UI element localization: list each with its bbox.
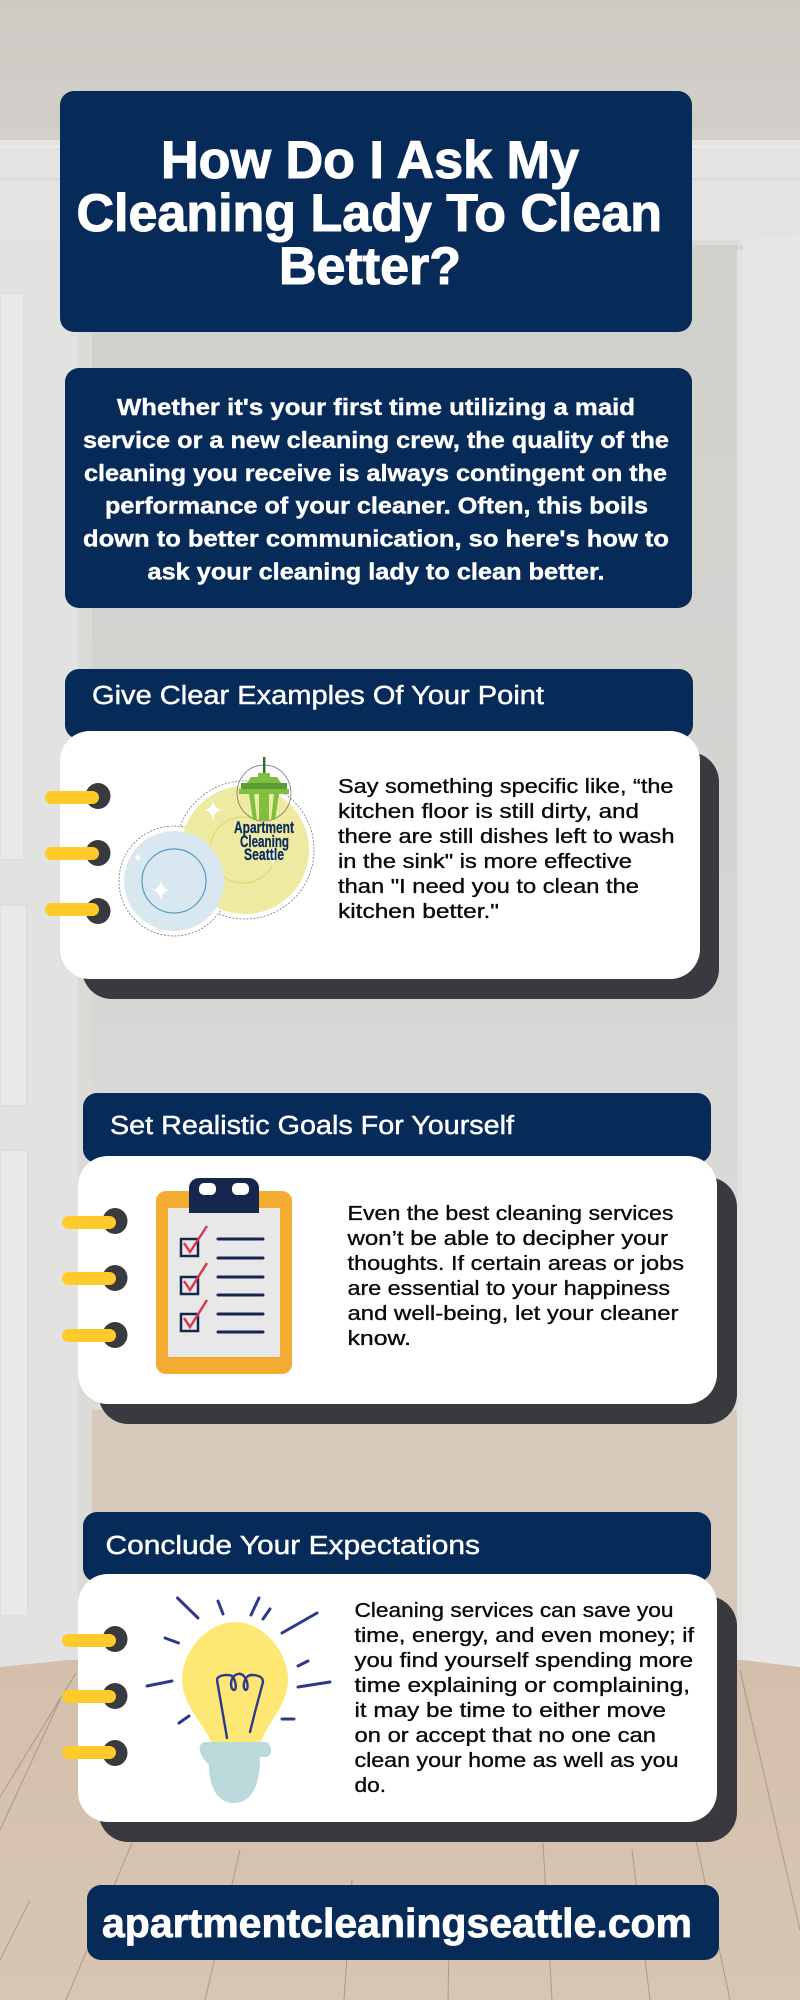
footer website banner: apartmentcleaningseattle.com [102,1900,692,1946]
panel: give clear examples [45,669,719,999]
intro text: service or a new cleaning crew, the quality of the [83,427,669,453]
card text: know. [348,1327,411,1350]
card text: kitchen floor is still dirty, and [338,800,639,823]
white card [78,1156,717,1404]
card text: are essential to your happiness [348,1277,670,1300]
section heading bar [83,1093,711,1163]
intro text: ask your cleaning lady to clean better. [148,558,604,584]
section heading bar [65,669,693,739]
card shadow [98,1596,737,1842]
intro text: cleaning you receive is always contingent on the [84,460,667,486]
icon: plates with logo: Seattle [244,845,284,864]
card text: there are still dishes left to wash [338,825,674,848]
white card [78,1574,717,1822]
icon: light bulb [147,1598,330,1803]
white card [60,731,700,979]
intro text: Whether it's your first time utilizing a maid [117,394,635,420]
card text: Even the best cleaning services [348,1202,674,1225]
card shadow [82,752,719,999]
title banner [60,91,692,332]
card text: thoughts. If certain areas or jobs [348,1252,684,1275]
card text [338,775,674,923]
intro text [83,394,669,584]
intro panel [65,368,692,608]
binder rings [62,1626,128,1766]
icon: clipboard checklist [156,1178,292,1374]
card text: time, energy, and even money; if [354,1624,694,1647]
card text: on or accept that no one can [354,1724,656,1747]
section heading bar: Give Clear Examples Of Your Point [92,682,544,710]
card text [354,1599,694,1797]
card text [346,1202,684,1350]
card text: clean your home as well as you [354,1749,678,1772]
title text: Cleaning Lady To Clean [76,184,662,243]
card text: Say something specific like, “the [338,775,674,798]
section heading bar: Set Realistic Goals For Yourself [110,1112,515,1140]
title text: Better? [279,237,461,296]
card text: won’t be able to decipher your [346,1227,668,1250]
card text: and well-being, let your cleaner [348,1302,679,1325]
card text: do. [354,1774,386,1797]
card text: in the sink" is more effective [338,850,632,873]
section heading bar: Conclude Your Expectations [106,1532,480,1560]
icon: plates with logo [119,757,314,936]
card shadow [98,1177,737,1424]
card text: it may be time to either move [354,1699,666,1722]
panel: conclude your expectations [62,1512,737,1842]
title text [76,131,662,296]
icon: plates with logo: Cleaning [240,832,289,851]
panel: set realistic goals [62,1093,737,1424]
icon: plates with logo: Apartment [234,818,294,837]
binder rings [45,783,110,924]
intro text: performance of your cleaner. Often, this boils [105,492,648,518]
section heading bar [83,1512,711,1582]
binder rings [62,1208,128,1348]
title text: How Do I Ask My [161,131,580,190]
card text: you find yourself spending more [354,1649,693,1672]
intro text: down to better communication, so here's how to [83,526,669,552]
card text: than "I need you to clean the [338,875,639,898]
footer website banner [87,1885,719,1960]
card text: time explaining or complaining, [354,1674,690,1697]
card text: kitchen better." [338,900,499,923]
card text: Cleaning services can save you [354,1599,674,1622]
